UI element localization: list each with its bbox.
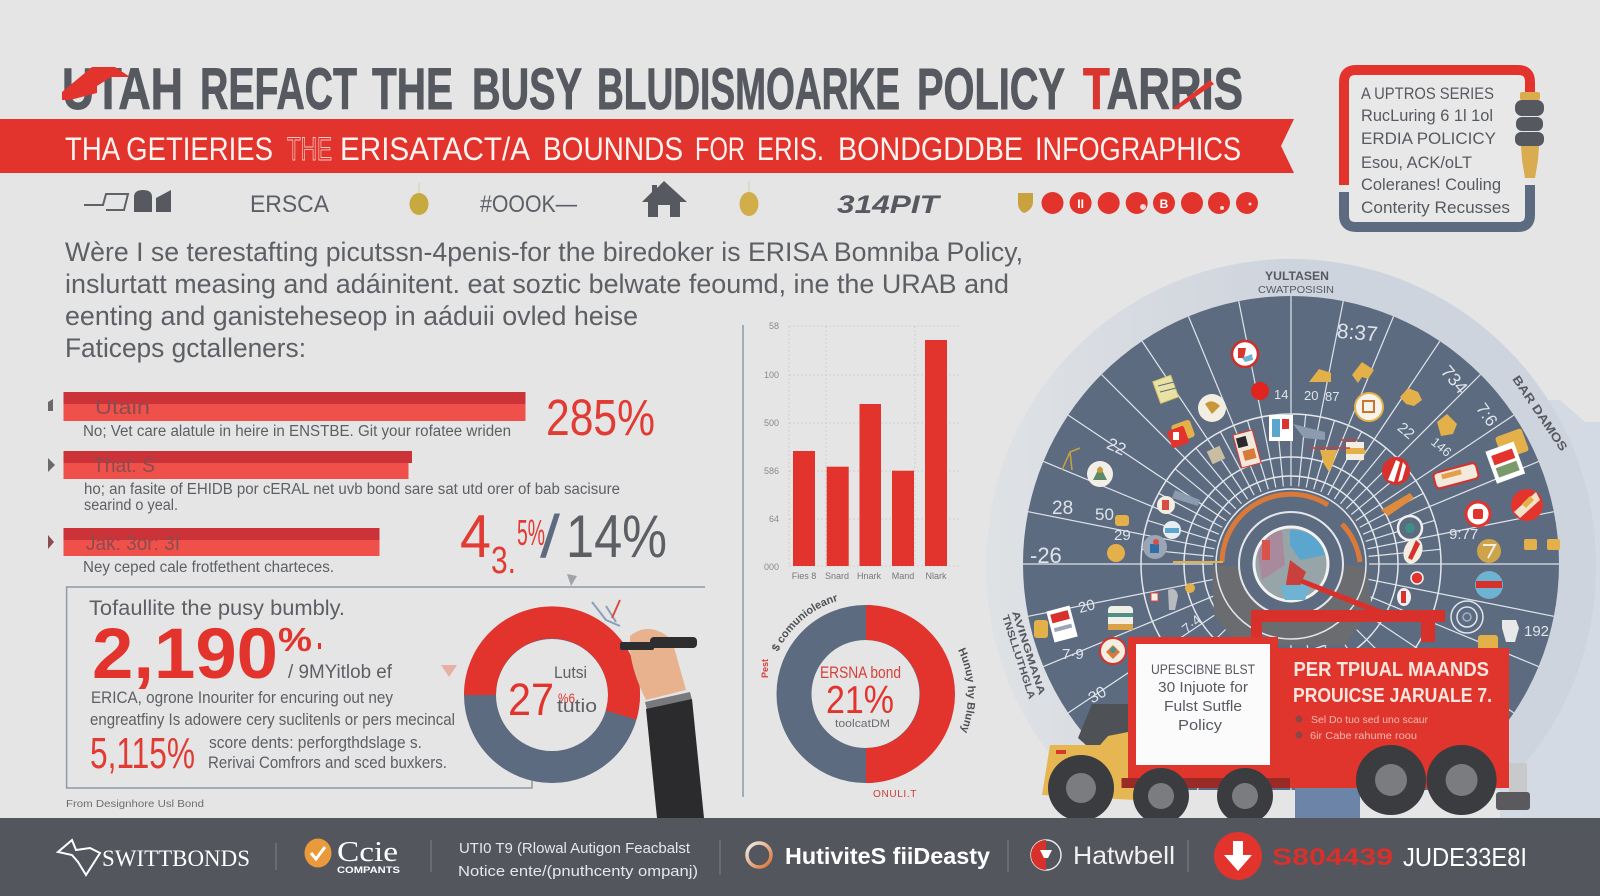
chassis strip bbox=[1122, 778, 1290, 788]
panel: ranked bars bbox=[48, 389, 667, 586]
cab bbox=[1042, 704, 1135, 800]
intro paragraph: eenting and ganisteheseop in aáduii ovled heise bbox=[65, 301, 638, 331]
donut chart 27%: %6 bbox=[558, 690, 575, 706]
text: series callout copy bbox=[1361, 84, 1510, 217]
ring label left: TNSLLUTHGLA bbox=[999, 614, 1037, 701]
label: 314PIT: 314PIT bbox=[837, 191, 942, 219]
source note: From Designhore Usl Bond bbox=[66, 798, 204, 810]
label: coin scribble: #OOOK— bbox=[480, 191, 577, 218]
icon: camera outline bbox=[84, 190, 171, 212]
dial numbers: 29 bbox=[1114, 527, 1131, 544]
notice text bbox=[458, 840, 698, 880]
donut chart 21%: 21% bbox=[826, 679, 894, 722]
bar chart bbox=[764, 321, 960, 581]
ring label right: BAR DAMOS bbox=[1510, 373, 1570, 454]
donut chart 27%: 27 bbox=[508, 674, 554, 725]
stat: 4 3.5 / 14%: 3. bbox=[491, 540, 516, 582]
stat: 4 3.5 / 14%: 4 bbox=[460, 503, 491, 570]
dial numbers bbox=[1030, 320, 1549, 707]
outer ring bbox=[986, 259, 1596, 790]
bar chart: Fies 8 bbox=[792, 571, 816, 581]
dial icons bbox=[1034, 341, 1560, 664]
truck bullets bbox=[1296, 714, 1428, 742]
banner: subtitle ribbon: INFOGRAPHICS bbox=[1035, 131, 1241, 167]
dial numbers: 7:6 bbox=[1472, 400, 1501, 430]
legs bbox=[1295, 785, 1360, 818]
text: series callout copy: Coleranes! Couling bbox=[1361, 175, 1501, 194]
text: series callout copy: Esou, ACK/oLT bbox=[1361, 153, 1472, 172]
bar chart: Mand bbox=[892, 571, 914, 581]
crane bbox=[1251, 579, 1445, 645]
ring label top: YULTASEN bbox=[1265, 269, 1329, 283]
stat: 4 3.5 / 14%: 14% bbox=[566, 503, 667, 570]
stat: 2,190%: 2,190 bbox=[92, 615, 278, 694]
background: right light field bbox=[1500, 400, 1600, 818]
donut chart 21%: ONULI.T bbox=[873, 789, 917, 800]
bar row 1: No; Vet care alatule in heire in ENSTBE. Git your rofatee wriden bbox=[83, 423, 511, 440]
icon: gold ornament bbox=[410, 183, 428, 215]
stat: 5,115%: 5,115% bbox=[90, 729, 195, 778]
icon: plug bbox=[1515, 92, 1544, 178]
dial numbers: 30 bbox=[1086, 683, 1110, 707]
donut chart 21%: $ comunioleanr bbox=[772, 595, 837, 651]
stat: 4 3.5 / 14%: / bbox=[540, 503, 560, 570]
rear bbox=[1496, 763, 1530, 810]
bar chart: 64 bbox=[769, 514, 779, 524]
icon: small triangle bbox=[441, 665, 457, 677]
logo: Ccie bbox=[304, 837, 400, 875]
text: stat suffix: / 9MYitlob ef bbox=[288, 662, 393, 683]
truck headline bbox=[1293, 659, 1492, 707]
banner: subtitle ribbon: THE bbox=[287, 131, 332, 167]
label: ERSCA: ERSCA bbox=[250, 191, 329, 218]
heading: Tofaullite the pusy bumbly. bbox=[89, 597, 345, 620]
title: TARRIS bbox=[1083, 57, 1243, 122]
title: REFACT bbox=[200, 57, 357, 122]
white panel bbox=[1136, 644, 1270, 765]
logo: Hatwbell: Hatwbell bbox=[1073, 842, 1175, 870]
donut chart 27%: tutio bbox=[557, 696, 597, 716]
dial numbers: 20 bbox=[1076, 596, 1097, 617]
bar chart: 58 bbox=[769, 321, 779, 331]
title: POLICY bbox=[917, 57, 1065, 122]
truck headline: PROUICSE JARUALE 7. bbox=[1293, 685, 1492, 707]
title: THE bbox=[372, 57, 453, 122]
stat: 4 3.5 / 14% bbox=[460, 503, 667, 586]
dial numbers: 20 bbox=[1304, 388, 1318, 403]
cargo box bbox=[1128, 637, 1509, 788]
dial numbers: 7·4 bbox=[1179, 611, 1205, 637]
radial wheel bbox=[1002, 259, 1567, 790]
donut chart 21%: toolcatDM bbox=[835, 718, 890, 730]
text: series callout copy: Conterity Recusses bbox=[1361, 198, 1510, 217]
title: BUSY bbox=[472, 57, 582, 122]
title: UTAH bbox=[62, 57, 183, 122]
white panel: 30 Injuote for bbox=[1158, 679, 1248, 696]
text: description: ERICA, ogrone Inouriter for encuring out ney bbox=[91, 688, 393, 707]
dial numbers: 734 bbox=[1437, 362, 1472, 397]
stat: 2,190%: % bbox=[278, 621, 312, 658]
bar row 3 bbox=[48, 528, 380, 576]
ring label left bbox=[999, 610, 1047, 701]
truck bullets: Sel Do tuo sed uno scaur bbox=[1311, 714, 1428, 726]
dial numbers: 22 bbox=[1104, 434, 1129, 459]
intro paragraph: Wère I se terestafting picutssn-4penis-for the biredoker is ERISA Bomniba Policy, bbox=[65, 237, 1023, 267]
bar row 3: Jak: 3or: 3I bbox=[86, 533, 180, 555]
notice text: UTI0 T9 (Rlowal Autigon Feacbalst bbox=[459, 840, 691, 857]
hub rings bbox=[1216, 489, 1366, 639]
text: description: Rerivai Comfrors and sced buxkers. bbox=[208, 753, 447, 772]
donut chart 21%: Pest bbox=[760, 659, 770, 678]
logo: download badge bbox=[1214, 832, 1527, 880]
dial numbers: 14 bbox=[1274, 387, 1288, 402]
donut chart 21% bbox=[760, 595, 976, 800]
dial numbers: 87 bbox=[1325, 389, 1339, 404]
text: description: score dents: perforgthdslage s. bbox=[209, 733, 422, 752]
dial numbers: 22 bbox=[1394, 419, 1418, 443]
logo: Ccie: Ccie bbox=[337, 837, 398, 868]
bar row 1: 285% bbox=[546, 389, 655, 446]
divider line bbox=[742, 325, 744, 797]
ring label top bbox=[1258, 269, 1334, 296]
text: series callout copy: RucLuring 6 1l 1ol bbox=[1361, 106, 1493, 125]
truck bbox=[1042, 579, 1530, 824]
donut chart 21%: ERSNA bond bbox=[820, 663, 901, 682]
banner: subtitle ribbon: BONDGDDBE bbox=[838, 131, 1023, 167]
white panel: Fulst Sutfle bbox=[1164, 698, 1242, 715]
logo: Ccie: COMPANTS bbox=[337, 865, 400, 875]
wheels bbox=[1048, 745, 1497, 824]
white panel: UPESCIBNE BLST bbox=[1151, 661, 1255, 677]
bar chart: 500 bbox=[764, 418, 779, 428]
bar chart: Snard bbox=[825, 571, 849, 581]
bar chart: 000 bbox=[764, 562, 779, 572]
truck headline: PER TPIUAL MAANDS bbox=[1294, 659, 1489, 681]
bar row 2 bbox=[48, 451, 620, 514]
truck bullets: 6ir Cabe rahume roou bbox=[1310, 730, 1417, 742]
icon: red dots: II bbox=[1077, 197, 1084, 211]
bar row 1 bbox=[48, 389, 655, 446]
donut chart 27%: Lutsi bbox=[554, 663, 587, 682]
text: series callout copy: A UPTROS SERIES bbox=[1361, 84, 1494, 103]
logo: HutiviteS: HutiviteS fiiDeasty bbox=[785, 843, 990, 869]
logo: download badge: S804439 bbox=[1272, 844, 1393, 871]
bar chart: 586 bbox=[764, 466, 779, 476]
panel: total callout bbox=[67, 587, 705, 788]
ring label top: CWATPOSISIN bbox=[1258, 284, 1334, 296]
banner: subtitle ribbon: ERIS. bbox=[757, 131, 824, 167]
panel: series callout box bbox=[1344, 70, 1544, 227]
hub blob bbox=[1212, 566, 1372, 645]
globe bbox=[1254, 527, 1328, 601]
dial numbers: 50 bbox=[1095, 505, 1114, 524]
bar row 3: Ney ceped cale frotfethent charteces. bbox=[83, 559, 334, 576]
logo: SWITTBONDS: SWITTBONDS bbox=[102, 846, 250, 871]
footer bbox=[0, 818, 1600, 896]
title: BLUDISMOARKE bbox=[597, 57, 900, 122]
bar chart: Nlark bbox=[925, 571, 947, 581]
banner: subtitle ribbon: THA GETIERIES bbox=[65, 131, 273, 167]
intro paragraph: Faticeps gctalleners: bbox=[65, 333, 306, 363]
banner: subtitle ribbon: BOUNNDS bbox=[543, 131, 683, 167]
bar chart: 100 bbox=[764, 370, 779, 380]
dial disc bbox=[1023, 296, 1559, 832]
dial numbers: 9:77 bbox=[1449, 526, 1478, 543]
title bbox=[62, 57, 1243, 122]
bar row 1: Utain bbox=[95, 397, 150, 419]
text: description: engreatfiny Is adowere cery suclitenls or pers mecincal bbox=[90, 710, 455, 729]
dial numbers: 8:37 bbox=[1336, 320, 1379, 346]
icon row bbox=[84, 181, 1258, 219]
logo: Hatwbell bbox=[1031, 840, 1175, 870]
dial numbers: 28 bbox=[1052, 498, 1073, 519]
icon: gold shield bbox=[1018, 193, 1033, 213]
icon: house bbox=[642, 181, 687, 217]
bar row 2: ho; an fasite of EHIDB por cERAL net uvb bond sare sat utd orer of bab sacisure bbox=[84, 481, 620, 498]
bar row 2: That: S bbox=[93, 455, 155, 477]
banner: subtitle ribbon bbox=[0, 119, 1294, 173]
bar row 2: searind o yeal. bbox=[84, 497, 178, 514]
dial numbers: 192 bbox=[1524, 623, 1549, 640]
icon: gold ornament 2 bbox=[740, 181, 758, 216]
logo: SWITTBONDS bbox=[58, 840, 250, 875]
donut chart 27% bbox=[480, 622, 624, 767]
icon: hand with marker bbox=[592, 600, 704, 818]
banner: subtitle ribbon: FOR bbox=[695, 131, 745, 167]
donut chart 21%: Hunuy hy Bluny bbox=[958, 648, 976, 734]
icon: red dots bbox=[1042, 192, 1258, 214]
icon: red dots: B bbox=[1160, 197, 1169, 211]
ring label left: AVINGMANA bbox=[1009, 610, 1047, 697]
text: series callout copy: ERDIA POLICICY bbox=[1361, 129, 1496, 148]
dial numbers: -26 bbox=[1030, 543, 1062, 568]
text: description bbox=[90, 688, 455, 772]
stat: 4 3.5 / 14%: 5% bbox=[517, 512, 545, 553]
intro paragraph bbox=[65, 237, 1023, 363]
intro paragraph: inslurtatt measing and adáinitent. eat soztic belwate feoumd, ine the URAB and bbox=[65, 269, 1009, 299]
bar chart: Hnark bbox=[857, 571, 881, 581]
banner: subtitle ribbon: ERISATACT/A bbox=[340, 131, 531, 167]
white panel: Policy bbox=[1178, 717, 1223, 734]
dial numbers: 7·9 bbox=[1062, 646, 1084, 663]
logo: download badge: JUDE33E8I bbox=[1403, 842, 1527, 872]
notice text: Notice ente/(pnuthcenty ompanj) bbox=[458, 863, 698, 880]
dial numbers: 146 bbox=[1428, 434, 1454, 460]
